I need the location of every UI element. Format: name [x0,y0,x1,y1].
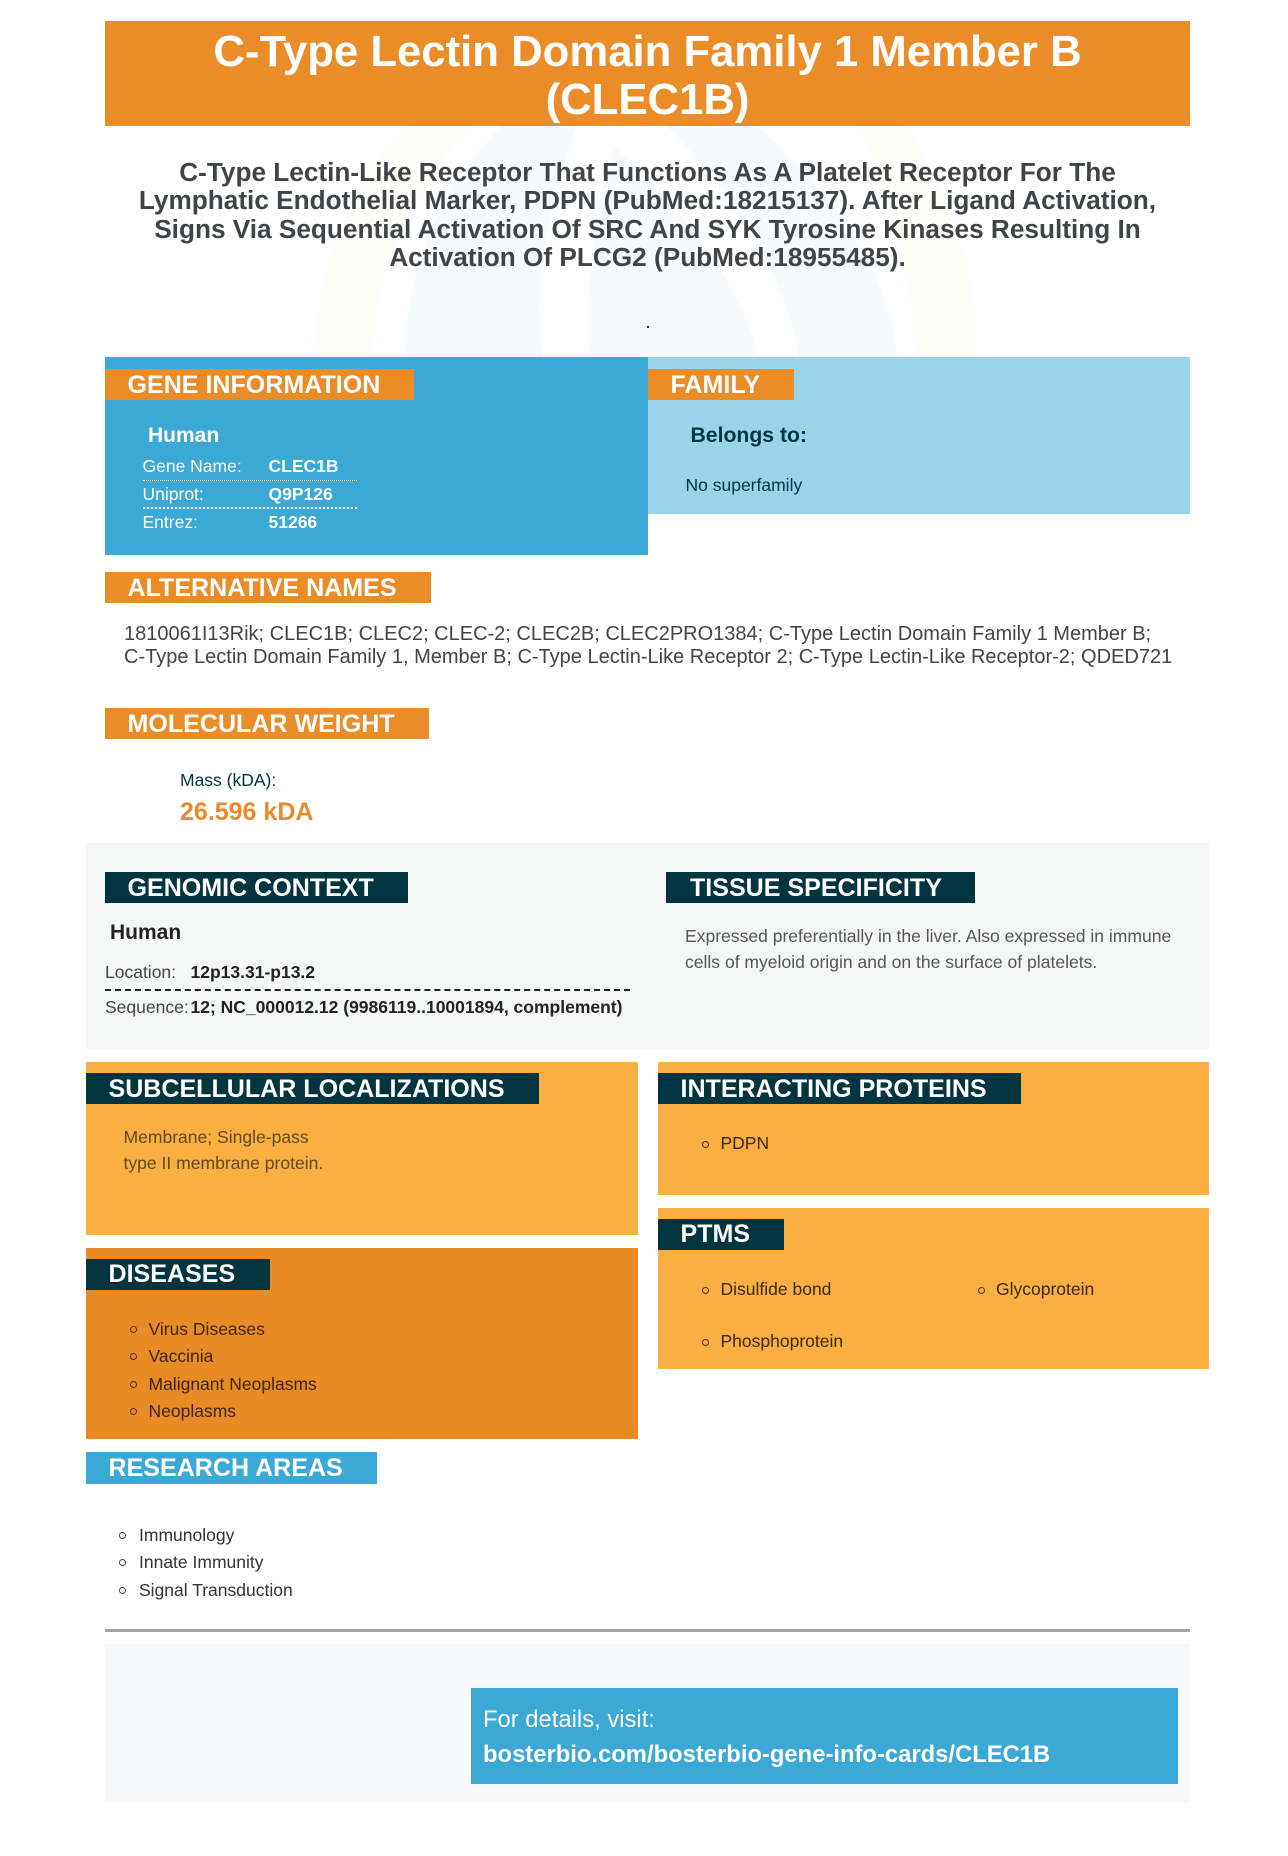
background watermark logo [0,0,1288,360]
details url: bosterbio.com/bosterbio-gene-info-cards/CLEC1B [483,1741,1050,1768]
panel: footer [105,1644,1190,1803]
alternative names text [124,623,1172,668]
title banner: (CLEC1B) [546,74,749,124]
disease list [130,1319,317,1421]
ptm list: Phosphoprotein [720,1331,843,1351]
panel: family [648,357,1190,514]
row: gene name [142,456,339,476]
localization text: Membrane; Single-pass [124,1127,309,1147]
alternative names text: C-Type Lectin Domain Family 1, Member B; C-Type Lectin-Like Receptor 2; C-Type Lectin-Like Receptor-2; QDED721 [124,646,1172,668]
disease list: Neoplasms [148,1401,236,1421]
panel: ptms [658,1208,1209,1369]
heading: family: FAMILY [670,371,760,399]
row: location: Location: [105,962,176,982]
research area list: Signal Transduction [139,1580,293,1600]
disease list: Virus Diseases [148,1319,265,1339]
tissue specificity text: Expressed preferentially in the liver. Also expressed in immune [685,926,1171,946]
title banner [105,21,1190,126]
heading: molecular weight: MOLECULAR WEIGHT [128,710,395,738]
species label: Human [110,921,181,944]
row: gene name: Gene Name: [142,456,242,476]
row: location: 12p13.31-p13.2 [190,962,315,982]
research area list: Innate Immunity [139,1552,264,1572]
heading: diseases [86,1259,270,1290]
title banner: C-Type Lectin Domain Family 1 Member B [213,27,1082,76]
heading: ptms [658,1219,784,1250]
ptm list: Disulfide bond [720,1279,831,1299]
summary description: Lymphatic Endothelial Marker, PDPN (PubMed:18215137). After Ligand Activation, [139,185,1156,215]
panel: subcellular localizations [86,1062,638,1235]
panel: diseases [86,1248,638,1439]
row: entrez [142,512,317,532]
belongs to label: Belongs to: [690,424,807,446]
panel: gene information [105,357,648,555]
summary description: C-Type Lectin-Like Receptor That Functions As A Platelet Receptor For The [179,156,1116,186]
panel: research areas [86,1452,377,1600]
interacting protein list: PDPN [720,1133,769,1153]
research area list [119,1525,293,1600]
heading: subcellular localizations: SUBCELLULAR LOCALIZATIONS [108,1075,505,1103]
row: uniprot [142,484,333,504]
stray dot [647,326,649,328]
localization text: type II membrane protein. [124,1153,323,1173]
heading: ptms: PTMS [680,1220,750,1248]
row: gene name: CLEC1B [268,456,339,476]
summary description: Activation Of PLCG2 (PubMed:18955485). [389,242,906,272]
summary description [139,156,1156,272]
tissue specificity text [685,926,1171,972]
disease list: Malignant Neoplasms [148,1374,317,1394]
heading: tissue specificity: TISSUE SPECIFICITY [690,874,942,902]
heading: genomic context: GENOMIC CONTEXT [128,874,374,902]
ptm list: Glycoprotein [996,1279,1094,1299]
row: uniprot: Uniprot: [142,484,204,504]
heading: research areas: RESEARCH AREAS [108,1454,343,1482]
row: sequence: Sequence: [105,997,189,1017]
species label: Human [148,424,219,447]
superfamily value: No superfamily [686,475,802,495]
heading: diseases: DISEASES [108,1260,235,1288]
mass value: 26.596 kDA [180,798,313,826]
row: location [105,962,315,982]
alternative names text: 1810061I13Rik; CLEC1B; CLEC2; CLEC-2; CLEC2B; CLEC2PRO1384; C-Type Lectin Domain Family 1 Member B; [124,623,1151,645]
heading: family [648,369,794,400]
row: uniprot: Q9P126 [268,484,333,504]
summary description: Signs Via Sequential Activation Of SRC And SYK Tyrosine Kinases Resulting In [154,214,1141,244]
research area list: Immunology [139,1525,234,1545]
tissue specificity text: cells of myeloid origin and on the surface of platelets. [685,952,1097,972]
heading: interacting proteins: INTERACTING PROTEINS [680,1075,987,1103]
details label: For details, visit: [483,1706,655,1733]
mass label: Mass (kDA): [180,770,276,790]
disease list: Vaccinia [148,1346,213,1366]
row: entrez: Entrez: [142,512,198,532]
callout: details link [471,1688,1178,1784]
panel: genomic context and tissue specificity [86,843,1209,1049]
row: entrez: 51266 [268,512,317,532]
panel: interacting proteins [658,1062,1209,1195]
ptm list [702,1279,1094,1351]
heading: alternative names: ALTERNATIVE NAMES [128,574,397,602]
row: sequence: 12; NC_000012.12 (9986119..10001894, complement) [190,997,622,1017]
heading: gene information: GENE INFORMATION [128,371,380,399]
localization text [124,1127,323,1173]
